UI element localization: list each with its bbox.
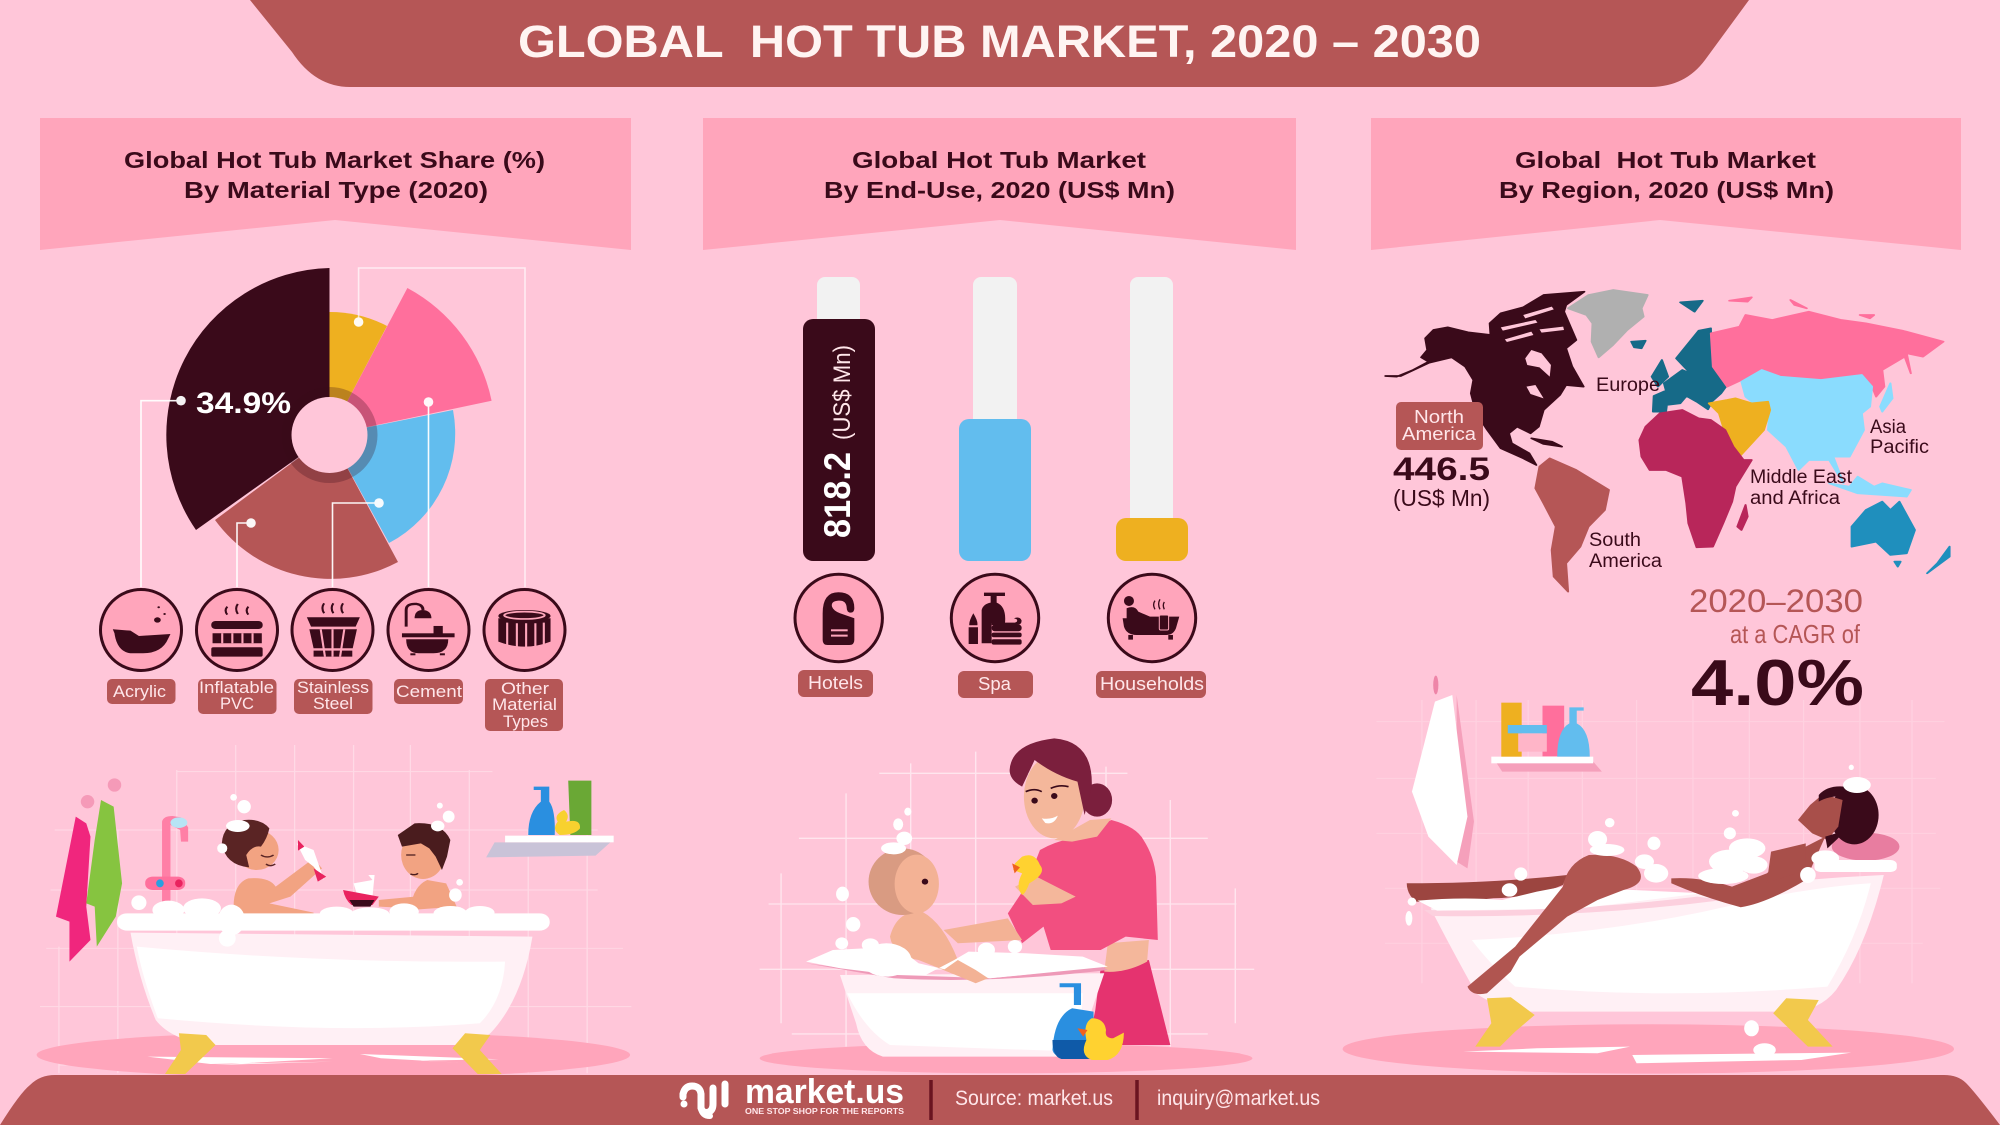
region: north america (1385, 292, 1584, 465)
panel: end-use (703, 118, 1296, 698)
bar: spa (959, 419, 1031, 561)
bar: hotels (803, 319, 875, 561)
callout: CAGR: 4.0% (1691, 646, 1864, 719)
footer bar (0, 1073, 2000, 1125)
labels: end-use (798, 670, 1206, 698)
callout: north america value (1393, 402, 1490, 511)
labels: material types: Acrylic (113, 682, 167, 701)
region: asia pacific (1741, 370, 1911, 497)
illustration: woman relaxing in bathtub (1343, 676, 1954, 1074)
labels: end-use: Households (1100, 674, 1204, 694)
callout: CAGR: 2020–2030 (1689, 583, 1863, 619)
region: south america (1535, 458, 1609, 592)
callout: north america value: 446.5 (1393, 451, 1490, 487)
labels: material types: Types (503, 712, 548, 731)
bar: households (1116, 518, 1188, 561)
map labels (1589, 375, 1929, 572)
labels: end-use: Hotels (808, 673, 863, 693)
heading: end-use: By End-Use, 2020 (US$ Mn) (824, 177, 1175, 203)
labels: material types: Material (492, 695, 557, 714)
labels: material types: Inflatable (199, 678, 274, 697)
chart: material share rose pie: 34.9% (196, 387, 291, 420)
labels: material types: Other (501, 679, 549, 698)
region: middle east (1709, 398, 1770, 457)
callout: north america value: North (1414, 407, 1464, 427)
map labels: South (1589, 530, 1641, 551)
footer contact: inquiry@market.us (1157, 1087, 1320, 1110)
callout: CAGR: at a CAGR of (1730, 619, 1861, 649)
labels: material types (107, 678, 563, 731)
chart: end-use bars (803, 277, 1188, 561)
region: greenland (1568, 290, 1648, 357)
region: russia (1711, 297, 1943, 397)
logo: market.us: market.us (745, 1073, 904, 1111)
icon row: material types (100, 590, 565, 670)
region: oceania (1852, 502, 1950, 573)
labels: material types: Stainless (297, 678, 369, 697)
labels: material types: PVC (220, 694, 254, 713)
labels: end-use: Spa (978, 674, 1012, 694)
bar: hotels: 818.2 (817, 452, 858, 538)
heading: region: By Region, 2020 (US$ Mn) (1499, 177, 1834, 203)
connector lines (141, 268, 525, 587)
callout: north america value: America (1402, 424, 1477, 444)
logo: market.us (680, 1073, 905, 1116)
heading: end-use (703, 118, 1296, 250)
panel: material type share (40, 118, 631, 731)
map labels: and Africa (1750, 488, 1840, 509)
title banner (250, 0, 1749, 87)
logo: market.us: ONE STOP SHOP FOR THE REPORTS (745, 1107, 905, 1116)
heading: end-use: Global Hot Tub Market (852, 147, 1146, 173)
panel: region (1371, 118, 1961, 719)
icon row: end-use (795, 574, 1196, 662)
heading: region: Global Hot Tub Market (1515, 147, 1816, 173)
map labels: Europe (1596, 375, 1660, 396)
labels: material types: Steel (313, 694, 353, 713)
region: africa (1639, 410, 1752, 547)
heading: material type: Global Hot Tub Market Share (%) (124, 147, 545, 173)
world map (1385, 290, 1950, 592)
chart: material share rose pie (166, 268, 492, 579)
footer source: Source: market.us (955, 1087, 1113, 1110)
heading: material type (40, 118, 631, 250)
labels: material types: Cement (396, 682, 462, 701)
bar: hotels: (US$ Mn) (829, 345, 856, 440)
illustration: children in bathtub (37, 745, 631, 1078)
illustration: mother bathing baby (760, 738, 1254, 1073)
heading: region (1371, 118, 1961, 250)
map labels: Asia (1870, 417, 1906, 438)
callout: north america value: (US$ Mn) (1393, 485, 1490, 511)
region: europe (1631, 301, 1727, 412)
callout: CAGR (1689, 583, 1864, 719)
map labels: America (1589, 551, 1662, 572)
map labels: Middle East (1750, 467, 1853, 488)
map labels: Pacific (1870, 437, 1929, 458)
heading: material type: By Material Type (2020) (184, 177, 488, 203)
title banner: GLOBAL HOT TUB MARKET, 2020 – 2030 (518, 16, 1481, 67)
